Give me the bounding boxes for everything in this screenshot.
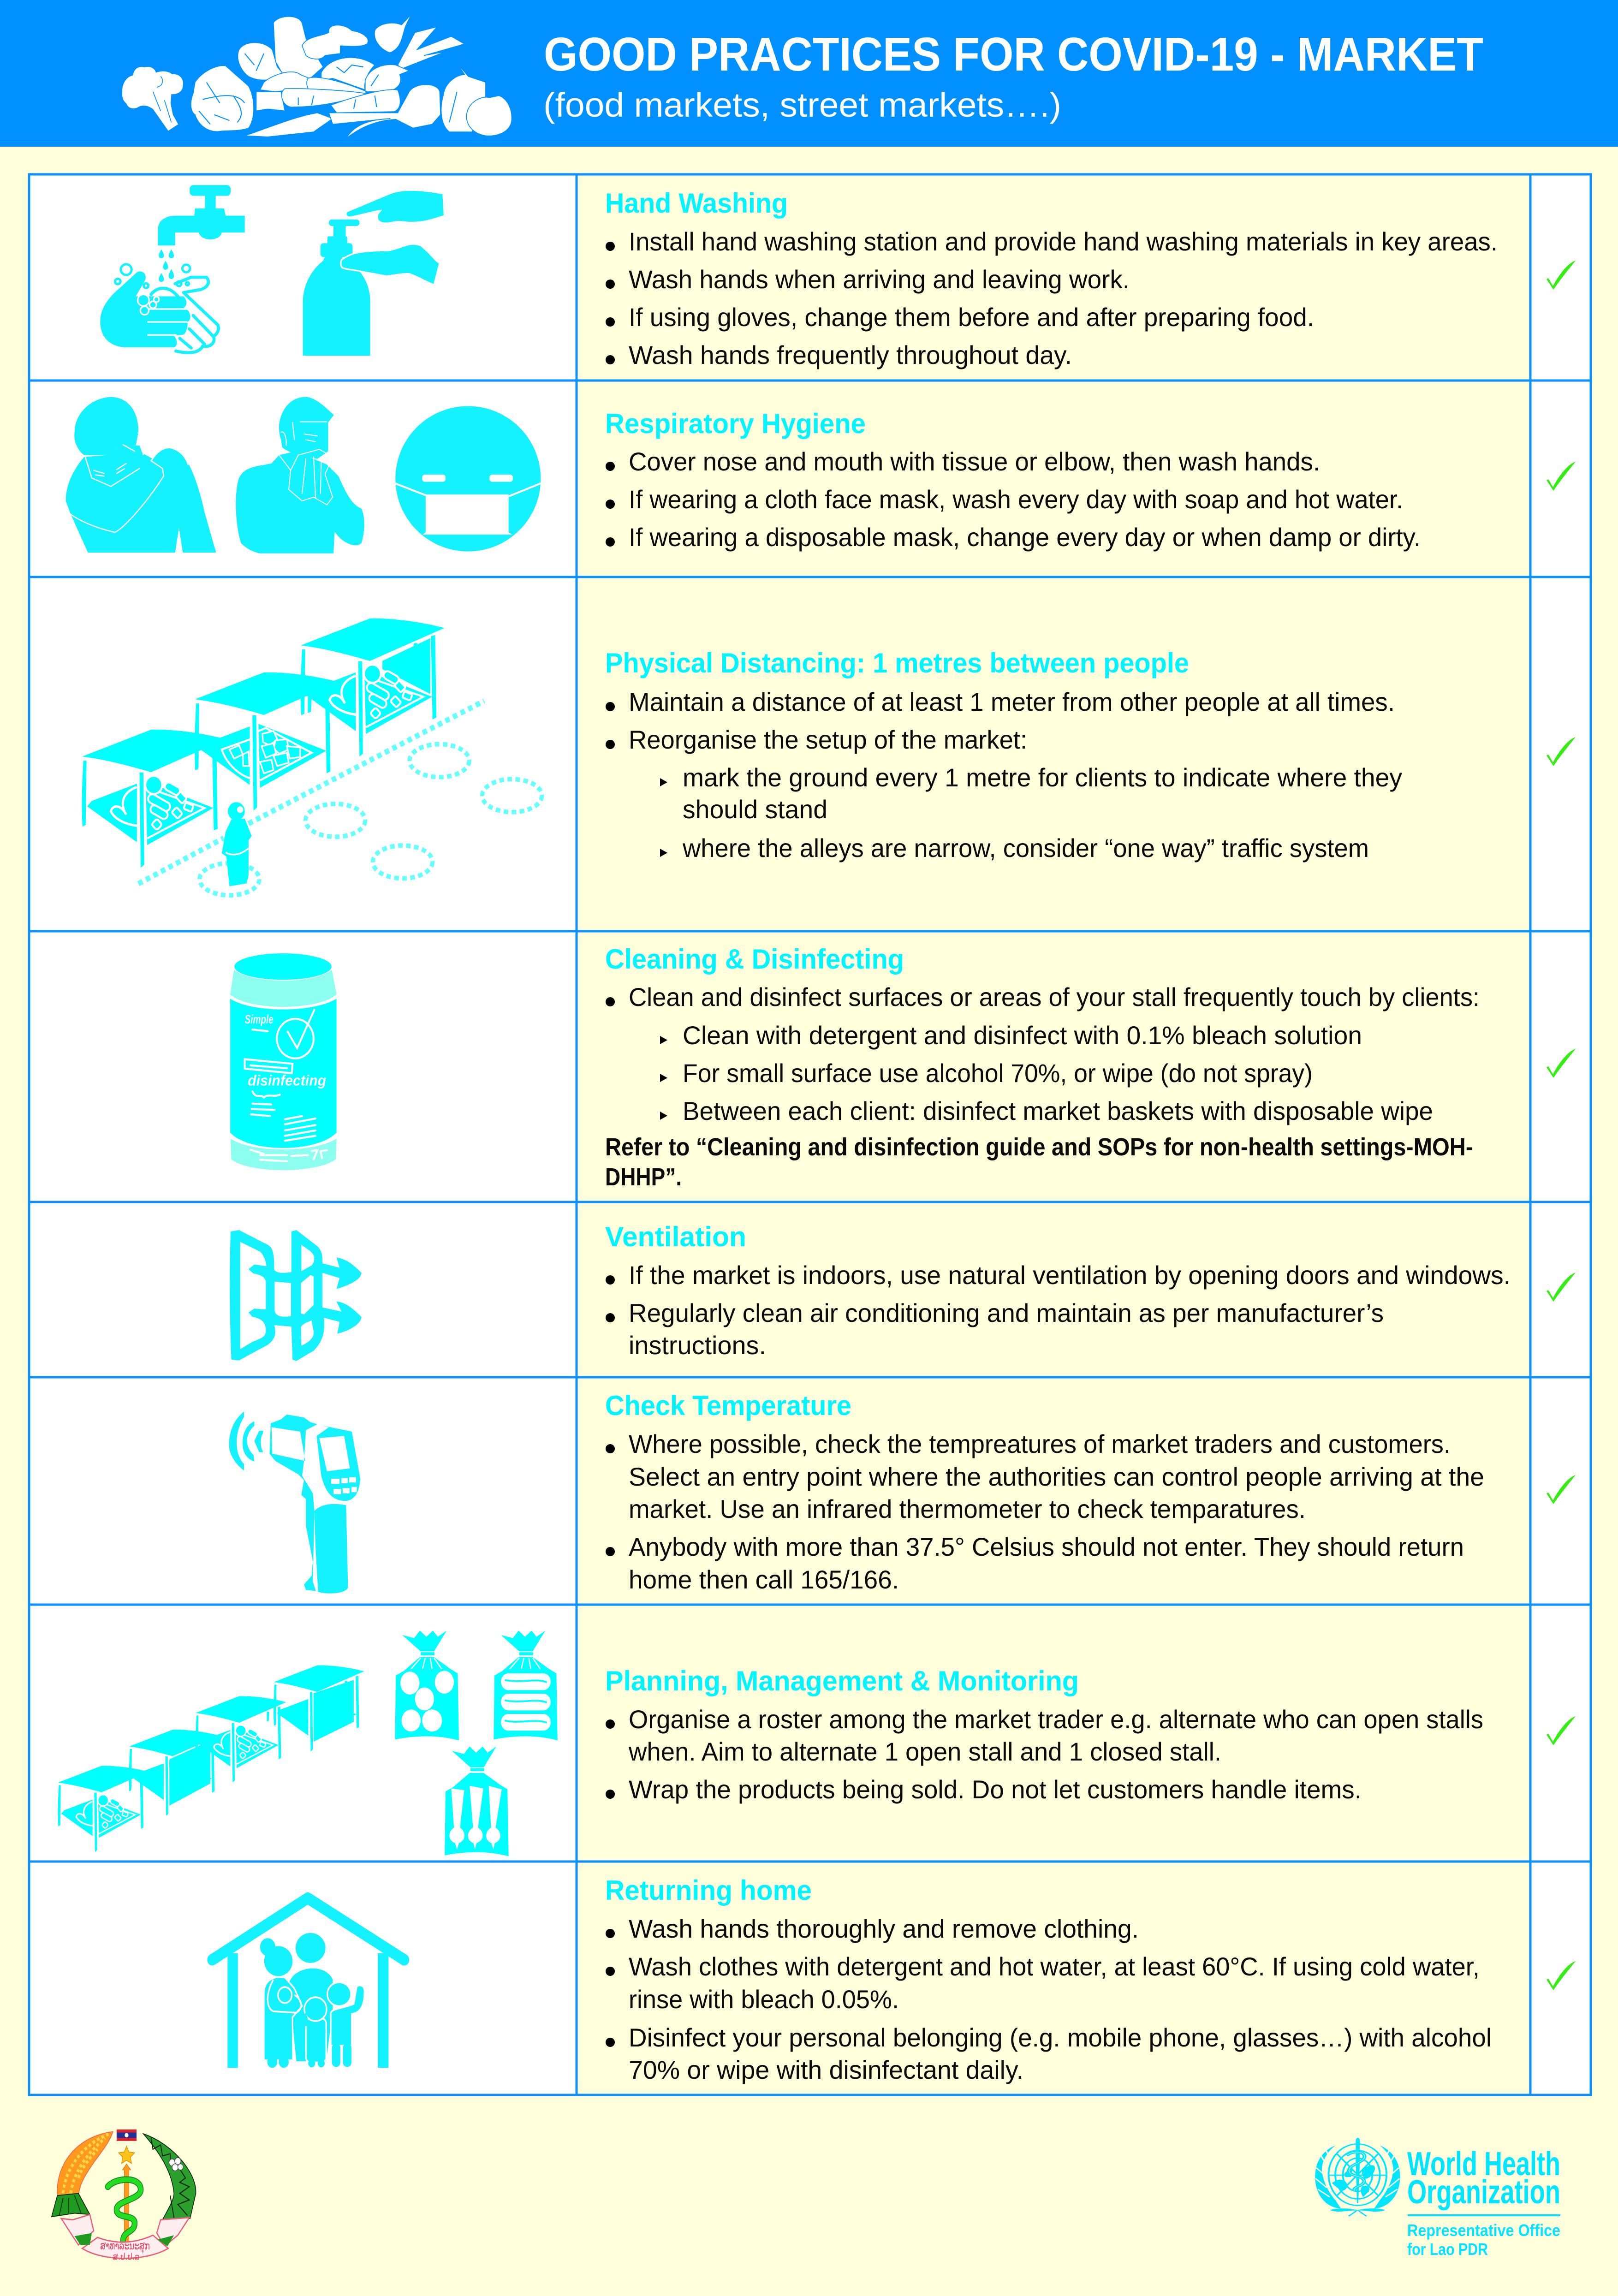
bullet list: Clean and disinfect surfaces or areas of your stall frequently touch by clients: xyxy=(629,982,1480,1011)
bullet list: Wash hands thoroughly and remove clothing. xyxy=(629,1914,1139,1943)
panel: returning home xyxy=(212,1875,1576,2084)
bullet list xyxy=(606,447,1421,552)
bullet list: when. Aim to alternate 1 open stall and 1 closed stall. xyxy=(628,1737,1221,1766)
check mark xyxy=(1547,1961,1576,1990)
icon: faucet and washing hands xyxy=(100,185,245,353)
panel: physical distancing xyxy=(82,619,1576,895)
bullet list xyxy=(606,227,1498,369)
bullet list: market. Use an infrared thermometer to check temparatures. xyxy=(629,1494,1306,1523)
stall three xyxy=(301,619,444,756)
icon: family in house xyxy=(212,1898,404,2068)
bullet list xyxy=(606,1914,1492,2084)
title: GOOD PRACTICES FOR COVID-19 - MARKET xyxy=(544,28,1483,81)
bullet list: Regularly clean air conditioning and maintain as per manufacturer’s xyxy=(629,1298,1384,1327)
bullet list xyxy=(606,687,1402,862)
bullet list: instructions. xyxy=(629,1331,766,1360)
icon: vegetables xyxy=(122,15,512,138)
bullet list: If the market is indoors, use natural ventilation by opening doors and windows. xyxy=(629,1261,1511,1290)
heading: Planning, Management & Monitoring xyxy=(605,1665,1079,1696)
bullet list: Wash hands when arriving and leaving work. xyxy=(629,265,1130,294)
bullet list: Clean with detergent and disinfect with 0.1% bleach solution xyxy=(683,1021,1362,1050)
heading: Hand Washing xyxy=(605,188,788,219)
heading: Returning home xyxy=(605,1875,812,1906)
check mark xyxy=(1547,261,1576,290)
check mark xyxy=(1547,1049,1576,1078)
bullet list: Between each client: disinfect market baskets with disposable wipe xyxy=(683,1096,1433,1125)
check mark xyxy=(1547,737,1576,766)
bullet list: Cover nose and mouth with tissue or elbow, then wash hands. xyxy=(629,447,1320,476)
icon: disinfecting wipes canister: disinfecting xyxy=(248,1072,326,1089)
bullet list: Disinfect your personal belonging (e.g. mobile phone, glasses…) with alcohol xyxy=(629,2023,1492,2052)
bullet list: mark the ground every 1 metre for clients to indicate where they xyxy=(683,763,1402,792)
icon: face mask xyxy=(395,406,541,552)
panel: check temperature xyxy=(229,1390,1576,1594)
icon: soap dispenser and hands xyxy=(303,191,444,356)
person xyxy=(222,802,252,886)
icon: disinfecting wipes canister xyxy=(230,953,337,1170)
bullet list: where the alleys are narrow, consider “one way” traffic system xyxy=(682,833,1369,862)
icon: wrapped produce bags xyxy=(395,1630,558,1856)
bag of radishes xyxy=(445,1747,509,1856)
panel: planning, management and monitoring xyxy=(58,1630,1576,1856)
check mark xyxy=(1547,1475,1576,1504)
bullet list: rinse with bleach 0.05%. xyxy=(629,1985,899,2014)
open stall xyxy=(58,1766,149,1852)
star xyxy=(119,2146,135,2163)
heading: Check Temperature xyxy=(605,1390,851,1421)
heading: Cleaning & Disinfecting xyxy=(605,944,904,975)
floor circles xyxy=(200,744,542,895)
icon: person coughing into elbow xyxy=(66,397,216,553)
logo: Lao Ministry of Health emblem: ສ.ປ.ປ.ລ xyxy=(113,2252,140,2262)
bullet list: Reorganise the setup of the market: xyxy=(629,725,1027,754)
bullet list: 70% or wipe with disinfectant daily. xyxy=(629,2055,1023,2084)
logo: World Health Organization: Representative Office xyxy=(1407,2221,1560,2240)
bullet list: Where possible, check the tempreatures of market traders and customers. xyxy=(629,1429,1451,1458)
stall two xyxy=(195,672,339,810)
bullet list: Anybody with more than 37.5° Celsius should not enter. They should return xyxy=(629,1532,1464,1561)
logo: World Health Organization: Organization xyxy=(1407,2174,1560,2211)
panel: cleaning and disinfecting xyxy=(230,944,1576,1191)
WHO emblem xyxy=(1315,2138,1400,2216)
bullet list: Install hand washing station and provide hand washing materials in key areas. xyxy=(629,227,1498,256)
bullet list: If using gloves, change them before and after preparing food. xyxy=(629,303,1314,332)
bullet list: Wrap the products being sold. Do not let customers handle items. xyxy=(629,1775,1362,1804)
icon: alternating open and closed stalls xyxy=(58,1665,364,1852)
bullet list xyxy=(606,1429,1484,1594)
bullet list: Select an entry point where the authorities can control people arriving at the xyxy=(629,1462,1484,1491)
check mark xyxy=(1547,1273,1576,1302)
staff xyxy=(122,2164,131,2244)
stall one xyxy=(82,730,226,868)
bag of round produce xyxy=(395,1630,459,1740)
icon: disinfecting wipes canister: Simple xyxy=(245,1013,274,1026)
rice sheaf xyxy=(57,2132,113,2195)
bullet list xyxy=(606,982,1480,1125)
subtitle: (food markets, street markets….) xyxy=(543,86,1061,124)
heading: Ventilation xyxy=(605,1221,746,1252)
bullet list: If wearing a cloth face mask, wash every day with soap and hot water. xyxy=(629,485,1403,514)
bullet list: home then call 165/166. xyxy=(629,1565,899,1594)
closed stall xyxy=(129,1730,220,1816)
flag xyxy=(117,2129,137,2141)
white flowers xyxy=(169,2158,183,2171)
header banner xyxy=(0,0,1618,147)
check mark xyxy=(1547,1716,1576,1745)
panel: hand washing xyxy=(100,185,1576,369)
closed stall xyxy=(274,1665,364,1751)
bullet list: If wearing a disposable mask, change every day or when damp or dirty. xyxy=(629,523,1421,552)
bullet list: should stand xyxy=(683,795,827,824)
icon: infrared thermometer xyxy=(229,1411,360,1594)
bullet list: Wash clothes with detergent and hot water, at least 60°C. If using cold water, xyxy=(629,1952,1480,1981)
panel: ventilation xyxy=(230,1221,1576,1361)
logo: World Health Organization: for Lao PDR xyxy=(1407,2240,1488,2259)
WHO wordmark: World Health xyxy=(1407,2146,1560,2183)
logo: World Health Organization xyxy=(1315,2138,1560,2259)
bold reference note: Refer to “Cleaning and disinfection guide and SOPs for non-health settings-MOH- xyxy=(605,1133,1473,1161)
open stall xyxy=(196,1696,286,1782)
bullet list: Maintain a distance of at least 1 meter from other people at all times. xyxy=(629,687,1395,716)
icon: market stalls with spaced floor markings xyxy=(82,619,542,895)
snake xyxy=(108,2180,141,2242)
heading: Respiratory Hygiene xyxy=(605,408,866,439)
bag of long produce xyxy=(494,1630,558,1740)
icon: person sneezing into tissue xyxy=(236,397,364,553)
panel: respiratory hygiene xyxy=(66,397,1576,553)
icon: open windows with air arrows xyxy=(230,1230,361,1361)
dotted line xyxy=(138,701,484,884)
logo: Lao Ministry of Health emblem: ສາທາລະນະສຸກ xyxy=(100,2240,150,2253)
bullet list xyxy=(606,1261,1511,1360)
bullet list: For small surface use alcohol 70%, or wipe (do not spray) xyxy=(683,1059,1313,1088)
bullet list xyxy=(606,1705,1483,1804)
bullet list: Organise a roster among the market trader e.g. alternate who can open stalls xyxy=(629,1705,1483,1734)
bold reference note: DHHP”. xyxy=(605,1163,682,1191)
check mark xyxy=(1547,462,1576,491)
heading: Physical Distancing: 1 metres between people xyxy=(605,648,1189,678)
bold reference note xyxy=(605,1133,1473,1191)
bullet list: Wash hands frequently throughout day. xyxy=(629,340,1072,369)
leaf branch xyxy=(143,2134,196,2220)
ribbon xyxy=(61,2214,189,2258)
logo: Lao Ministry of Health emblem xyxy=(52,2129,196,2262)
